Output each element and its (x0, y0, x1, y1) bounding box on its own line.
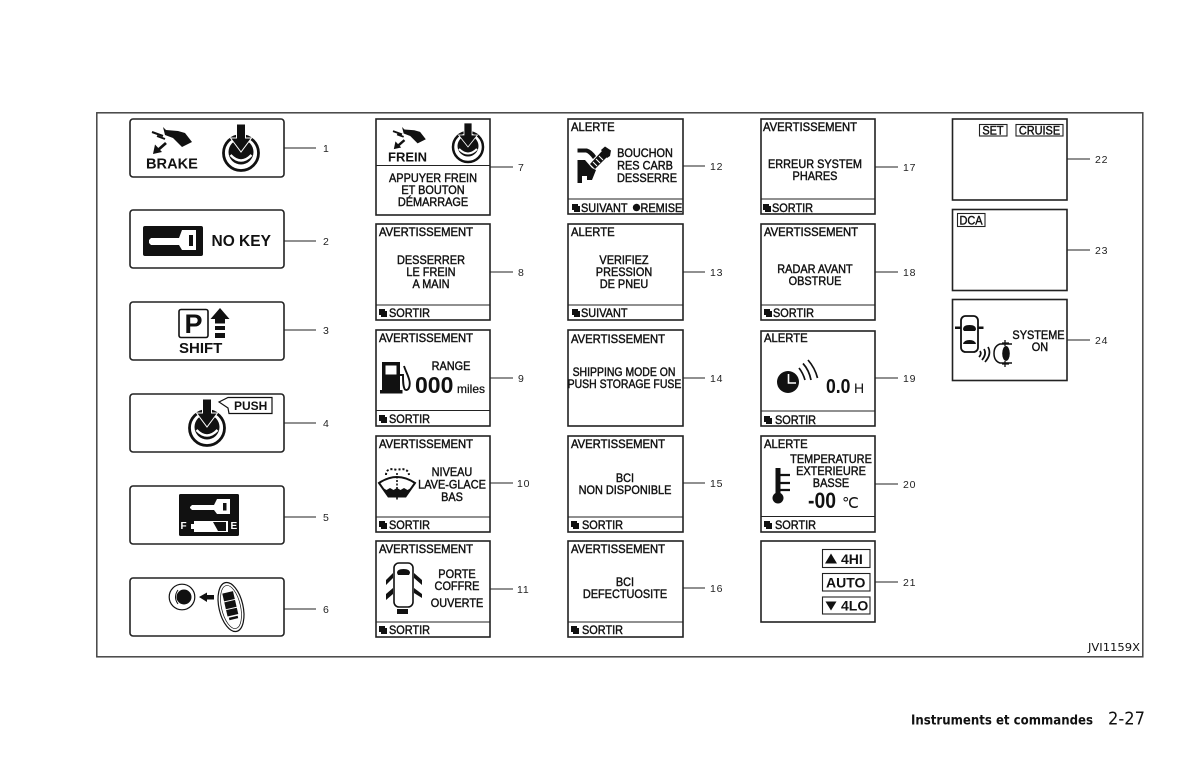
number 10: 10 (517, 478, 530, 490)
message text (777, 264, 853, 288)
panel 10: washer fluid (376, 436, 530, 532)
leader 17 (875, 166, 898, 168)
message text: RES CARB (617, 160, 673, 173)
icon: key fob (214, 580, 248, 634)
leader 23 (1067, 249, 1090, 251)
message text (431, 569, 484, 610)
icon: P box: P (184, 309, 203, 339)
message text (596, 255, 652, 291)
message text (579, 473, 672, 497)
icon: key and battery gauge: E (230, 521, 238, 532)
leader 18 (875, 271, 898, 273)
number 13: 13 (710, 267, 723, 279)
heading: AVERTISSEMENT (379, 438, 473, 451)
number 12: 12 (710, 161, 723, 173)
message text: OUVERTE (431, 598, 484, 610)
message text: BCI (616, 473, 634, 485)
heading: AVERTISSEMENT (571, 438, 665, 451)
heading: ALERTE (571, 121, 615, 134)
heading: AVERTISSEMENT (763, 121, 857, 134)
leader 16 (683, 587, 705, 589)
icon: windshield washer (379, 469, 415, 500)
leader 12 (683, 165, 705, 167)
heading: AVERTISSEMENT (379, 543, 473, 556)
footer: SORTIR (389, 625, 430, 637)
icon: clock with waves (777, 360, 818, 393)
panel 21: 4WD mode (761, 541, 916, 622)
number 9: 9 (518, 373, 525, 385)
heading: AVERTISSEMENT (379, 226, 473, 239)
label: SHIFT: SHIFT (179, 340, 222, 357)
number 18: 18 (903, 267, 916, 279)
message text: EXTERIEURE (796, 466, 866, 478)
leader 21 (875, 581, 898, 583)
footer (761, 516, 875, 532)
number 17: 17 (903, 162, 916, 174)
leader 2 (284, 240, 316, 242)
icon: fuel cap (578, 146, 611, 183)
label: NO KEY: NO KEY (212, 233, 272, 250)
leader 15 (683, 482, 705, 484)
leader 11 (490, 588, 513, 590)
number 8: 8 (518, 267, 525, 279)
panel 8: release parking brake (376, 224, 525, 320)
panel 3: shift from P (130, 302, 330, 360)
icon: cars and sensor waves (955, 316, 1012, 367)
number 6: 6 (323, 604, 330, 616)
icon: up arrow (210, 308, 230, 338)
panel 18: radar obstructed (761, 224, 916, 320)
heading: ALERTE (764, 332, 808, 345)
footer: SUIVANT (581, 203, 628, 215)
message text: DÉMARRAGE (398, 196, 469, 209)
message text (568, 367, 681, 391)
icon: hand on brake (393, 127, 426, 149)
panel 23: DCA (952, 210, 1108, 290)
footer (761, 305, 875, 320)
panel 19: timer (761, 331, 916, 427)
footer: SORTIR (773, 308, 814, 320)
message text: LE FREIN (406, 267, 456, 279)
badge: 4HI (822, 550, 870, 568)
message text (397, 255, 465, 291)
leader 22 (1067, 158, 1090, 160)
value: -00: -00 (808, 489, 836, 513)
message text: PRESSION (596, 267, 652, 279)
panel 22: cruise set (952, 119, 1108, 200)
badge: 4LO: 4LO (841, 598, 868, 614)
leader 7 (490, 166, 513, 168)
message text (790, 454, 872, 490)
panel 17: headlight system error (761, 119, 916, 215)
divider (376, 164, 490, 166)
label: FREIN: FREIN (388, 150, 427, 164)
heading: ALERTE (764, 438, 808, 451)
panel 16: BCI fault (568, 541, 723, 637)
message text (583, 577, 667, 601)
panel 11: door trunk open (376, 541, 530, 637)
leader 24 (1067, 339, 1090, 341)
heading: AVERTISSEMENT (571, 543, 665, 556)
footer (568, 199, 683, 215)
message text: COFFRE (435, 581, 480, 593)
message text: DE PNEU (600, 279, 648, 291)
message text (418, 467, 486, 504)
icon: key on black (143, 226, 203, 256)
message text: SYSTEME (1012, 330, 1065, 342)
heading: AVERTISSEMENT (379, 332, 473, 345)
footer: SORTIR (775, 415, 816, 427)
icon: car with open doors (386, 563, 422, 614)
panel 15: BCI unavailable (568, 436, 723, 532)
panel 24: system on (952, 300, 1108, 380)
section title: Instruments et commandes (911, 714, 1093, 728)
leader 20 (875, 483, 898, 485)
message text: DESSERRE (617, 173, 677, 185)
number 2: 2 (323, 236, 330, 248)
footer: SORTIR (582, 625, 623, 637)
message text: PHARES (793, 171, 838, 183)
footer (568, 305, 683, 320)
number 4: 4 (323, 418, 330, 430)
number 15: 15 (710, 478, 723, 490)
icon: hand pressing brake (152, 127, 192, 154)
icon: fuel pump (380, 362, 410, 394)
badge: DCA: DCA (959, 215, 983, 228)
message text: SHIPPING MODE ON (573, 367, 675, 379)
footer (376, 517, 490, 532)
footer: SORTIR (389, 520, 430, 532)
number 11: 11 (517, 584, 530, 596)
message text: LAVE-GLACE (418, 479, 486, 492)
footer (376, 305, 490, 320)
number 1: 1 (323, 143, 330, 155)
message text: ON (1032, 342, 1048, 354)
unit: miles: miles (457, 382, 485, 396)
message text (389, 173, 477, 209)
footer: REMISE (640, 203, 683, 215)
unit: °C: ℃ (842, 495, 859, 512)
badge: 4LO (822, 597, 870, 614)
leader 3 (284, 329, 316, 331)
label: RANGE: RANGE (432, 361, 471, 373)
panel 12: fuel cap loose (568, 119, 723, 215)
outer frame (97, 113, 1143, 657)
leader 10 (490, 482, 513, 484)
message text (617, 148, 677, 185)
panel 20: low outside temperature (761, 436, 916, 532)
value: 000: 000 (415, 372, 453, 398)
panel 14: shipping mode (568, 330, 723, 426)
message text: PORTE (438, 569, 476, 581)
badge: SET: SET (982, 125, 1004, 138)
number 23: 23 (1095, 245, 1108, 257)
message text: ERREUR SYSTEM (768, 159, 862, 171)
panel 4: push (130, 394, 330, 452)
message text: RADAR AVANT (777, 264, 853, 276)
number 20: 20 (903, 479, 916, 491)
message text: APPUYER FREIN (389, 173, 477, 185)
heading: ALERTE (571, 226, 615, 239)
number 19: 19 (903, 373, 916, 385)
leader 13 (683, 271, 705, 273)
message text: ET BOUTON (401, 185, 465, 197)
icon: push button (224, 124, 258, 170)
message text: VERIFIEZ (599, 255, 649, 267)
figure reference code: JVI1159X (1087, 641, 1140, 654)
message text: TEMPERATURE (790, 454, 872, 466)
footer: SORTIR (389, 414, 430, 426)
message text: OBSTRUE (789, 276, 842, 288)
number 14: 14 (710, 373, 723, 385)
unit: H: H (854, 380, 864, 396)
footer (568, 622, 683, 637)
leader 19 (875, 377, 898, 379)
message text: PUSH STORAGE FUSE (568, 379, 681, 391)
icon: key and battery gauge: F (180, 521, 187, 532)
number 24: 24 (1095, 335, 1108, 347)
leader 6 (284, 608, 316, 610)
footer (761, 411, 875, 427)
message text: BCI (616, 577, 634, 589)
footer (568, 517, 683, 532)
icon: start button (169, 584, 195, 610)
panel 13: tire pressure (568, 224, 723, 320)
message text: DEFECTUOSITE (583, 589, 667, 601)
badge: CRUISE: CRUISE (1019, 125, 1060, 138)
panel 2: no key (130, 210, 330, 268)
leader 5 (284, 516, 316, 518)
footer (376, 622, 490, 637)
message text: BASSE (813, 478, 850, 490)
badge: AUTO: AUTO (826, 574, 866, 590)
panel 1: brake and button (130, 119, 330, 177)
message text: BAS (441, 492, 463, 504)
leader 8 (490, 271, 513, 273)
message text: BOUCHON (617, 148, 673, 160)
panel 7: press brake and start button (376, 119, 525, 215)
leader 4 (284, 422, 316, 424)
footer: SUIVANT (581, 308, 628, 320)
leader 9 (490, 377, 513, 379)
panel 9: range (376, 330, 525, 426)
icon: thermometer (772, 468, 790, 504)
footer: SORTIR (389, 308, 430, 320)
footer (761, 199, 875, 215)
icon: push button (190, 399, 224, 446)
panel 5: key battery low (130, 486, 330, 544)
message text (768, 159, 862, 183)
number 21: 21 (903, 577, 916, 589)
leader 1 (284, 147, 316, 149)
arrow (199, 592, 214, 602)
icon: key and battery gauge (179, 494, 239, 536)
message text: A MAIN (412, 279, 450, 291)
footer: SORTIR (775, 520, 816, 532)
heading: AVERTISSEMENT (571, 333, 665, 346)
footer: SORTIR (582, 520, 623, 532)
heading: AVERTISSEMENT (764, 226, 858, 239)
message text: DESSERRER (397, 255, 465, 267)
message text (1012, 330, 1065, 354)
panel 6: key fob to button (130, 578, 330, 636)
value: 0.0: 0.0 (826, 375, 850, 397)
number 16: 16 (710, 583, 723, 595)
footer: SORTIR (772, 203, 813, 215)
number 3: 3 (323, 325, 330, 337)
number 7: 7 (518, 162, 525, 174)
leader 14 (683, 377, 705, 379)
message text: NIVEAU (432, 467, 472, 479)
number 22: 22 (1095, 154, 1108, 166)
footer (376, 410, 490, 426)
callout: PUSH (219, 398, 272, 414)
icon: P box (179, 309, 208, 339)
label: BRAKE: BRAKE (146, 156, 198, 172)
page number: 2-27 (1108, 708, 1145, 730)
badge: 4HI: 4HI (841, 551, 863, 567)
number 5: 5 (323, 512, 330, 524)
callout: PUSH: PUSH (234, 399, 267, 413)
icon: button (453, 123, 483, 162)
message text: NON DISPONIBLE (579, 485, 672, 497)
